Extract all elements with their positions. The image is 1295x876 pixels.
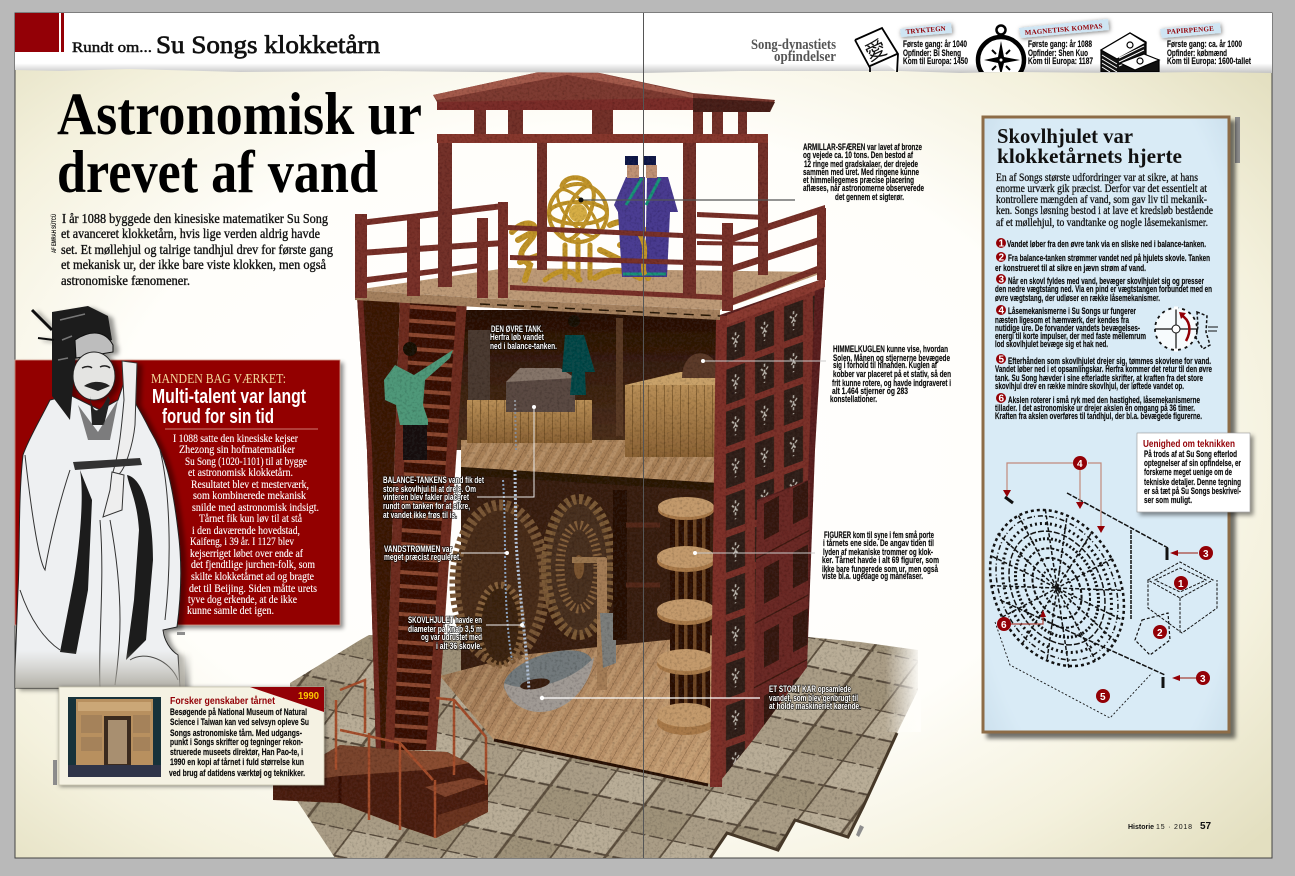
- caption: paddle wheel: SKOVLHJULET havde en: [408, 615, 482, 625]
- water stream: [503, 470, 529, 690]
- stone tile platform: [290, 635, 921, 858]
- callout: uenighed om teknikken: ser som muligt.: [1144, 495, 1192, 505]
- caption: celestial globe: konstellationer.: [830, 394, 877, 404]
- step 4: nutidige ure. De forvander vandets bevægelses-: [995, 323, 1140, 333]
- panel body text: Resultatet blev et mesterværk,: [191, 478, 309, 491]
- step 1: 1: [998, 238, 1004, 250]
- caption: celestial globe: HIMMELKUGLEN kunne vise, hvordan: [833, 344, 948, 354]
- step 6: tillader. I det astronomiske ur drejer akslen én omgang på 36 timer.: [995, 403, 1195, 413]
- header band: [15, 13, 1272, 73]
- step 2: [995, 252, 1210, 273]
- caption: paddle wheel: i alt 36 skovle.: [436, 641, 482, 651]
- panel body text: Songs astronomiske tårn. Med udgangs-: [170, 728, 302, 738]
- inventions heading: [751, 37, 837, 65]
- caption: armillary sphere: 12 ringe med gradskalaer, der drejede: [804, 159, 918, 169]
- panel: skovlhjulet: [964, 117, 1229, 732]
- step 5: Vandet løber ned i et opsamlingskar. Herfra kommer det retur til den øvre: [995, 364, 1212, 374]
- panel body text: snilde med astronomisk indsigt.: [192, 501, 319, 514]
- figure drums: [657, 497, 715, 735]
- callout: uenighed om teknikken: er så tæt på Su Songs beskrivel-: [1144, 486, 1241, 496]
- step 5: skovlhjul drev en række mindre skovlhjul, der løftede vandet op.: [995, 381, 1184, 391]
- panel body text: kejserriget løbet over ende af: [190, 547, 303, 560]
- intro text: astronomiske fænomener.: [61, 273, 190, 288]
- panel heading: [997, 124, 1182, 168]
- page footer: [1128, 821, 1212, 832]
- main title: Astronomisk ur: [57, 81, 422, 147]
- step 3: Når en skovl fyldes med vand, bevæger skovlhjulet sig og presser: [1008, 276, 1204, 286]
- panel body text: i den daværende hovedstad,: [192, 524, 300, 537]
- leader line: tub: [540, 696, 760, 700]
- caption: water stream: [384, 544, 461, 562]
- caption: celestial globe: Solen, Månen og stjernerne bevægede: [833, 353, 950, 363]
- main title: [57, 81, 422, 205]
- label: magnetisk kompas: Første gang: år 1088: [1028, 39, 1092, 49]
- label: magnetisk kompas: Opfinder: Shen Kuo: [1028, 48, 1088, 58]
- caption: figures: viste bl.a. ugedage og månefaser.: [822, 571, 923, 581]
- page footer: 57: [1200, 821, 1212, 832]
- caption: upper tank: DEN ØVRE TANK.: [491, 324, 543, 334]
- caption: celestial globe: sig i forhold til hinanden. Kuglen af: [833, 360, 937, 370]
- crates and tank: [467, 353, 720, 457]
- panel intro: enorme urværk gik præcist. Derfor var det essentielt at: [996, 182, 1208, 195]
- caption: tub: ET STORT KAR opsamlede: [769, 684, 851, 694]
- panel intro: [996, 171, 1213, 229]
- step 4: 4: [998, 306, 1004, 316]
- intro text: et avanceret klokketårn, hvis lige verden aldrig havde: [61, 226, 320, 241]
- caption: figures: FIGURER kom til syne i fem små porte: [824, 530, 934, 540]
- step 5: 5: [998, 354, 1004, 366]
- platform deck: [355, 268, 825, 320]
- panel heading: klokketårnets hjerte: [997, 144, 1182, 168]
- 1990 corner flag: 1990: [298, 691, 319, 702]
- caption: paddle wheel: diameter på knap 3,5 m: [408, 624, 482, 634]
- diagram callouts: 4: [1077, 459, 1083, 470]
- inventions heading: Song-dynastiets: [751, 37, 836, 53]
- diagram callouts: [997, 456, 1213, 703]
- step 4: Låsemekanismerne i Su Songs ur fungerer: [1008, 306, 1136, 316]
- worker at tank: [562, 315, 595, 395]
- step 4: lod skovlhjulet bevæge sig et hak ned.: [995, 339, 1108, 349]
- leader line: celestial globe: [701, 359, 826, 363]
- caption: celestial globe: alt 1.464 stjerner og 283: [832, 386, 908, 396]
- panel body text: [173, 432, 319, 617]
- leader line: armillary: [578, 198, 795, 202]
- panel intro: ken. Songs løsning bestod i at lave et kredsløb bestående: [996, 204, 1213, 217]
- caption: balance tank: [383, 475, 484, 520]
- step 1: [996, 238, 1206, 250]
- entrance steps and railing: [273, 680, 488, 838]
- railings and frame: [355, 202, 826, 311]
- panel: 1990 reconstruction: [59, 687, 324, 785]
- label: papirpenge: Kom til Europa: 1600-tallet: [1167, 56, 1251, 66]
- step 6: [995, 393, 1202, 421]
- tower illustration: [273, 66, 826, 838]
- caption: figures: ker. Tårnet havde i alt 69 figurer, som: [822, 555, 939, 565]
- caption: upper tank: [490, 324, 557, 351]
- panel body text: det til Beijing. Siden måtte urets: [189, 582, 317, 595]
- panel body text: [169, 707, 309, 778]
- label: tryktegn: [900, 23, 968, 66]
- two astronomers: [614, 156, 678, 277]
- label: magnetisk kompas: MAGNETISK KOMPAS: [1024, 22, 1103, 37]
- caption: upper tank: Herfra løb vandet: [490, 332, 544, 342]
- red tab: [15, 13, 64, 52]
- step 5: Efterhånden som skovlhjulet drejer sig, tømmes skovlene for vand.: [1008, 356, 1211, 366]
- panel heading: Multi-talent var langt: [152, 386, 306, 408]
- step 3: den nedre vægtstang ned. Via en pind er vægtstangen forbundet med en: [995, 284, 1212, 294]
- inventions heading: opfindelser: [774, 49, 837, 65]
- caption: armillary sphere: ARMILLAR-SFÆREN var lavet af bronze: [803, 142, 922, 152]
- caption: figures: [822, 530, 939, 581]
- callout: uenighed om teknikken: forskerne meget uenige om de: [1144, 467, 1232, 477]
- label: papirpenge: [1160, 23, 1251, 66]
- step 2: er konstrueret til at sikre en jævn strøm af vand.: [995, 263, 1146, 273]
- panel body text: struerede museets direktør, Han Pao-te, i: [170, 747, 303, 757]
- diagram callouts: 1: [1178, 579, 1184, 590]
- diagram callouts: 5: [1100, 692, 1106, 703]
- callout: uenighed om teknikken: tekniske detaljer. Denne tegning: [1144, 477, 1241, 487]
- diagram callouts: 2: [1157, 628, 1163, 639]
- byline: AF EMRAH SÜTCÜ: [49, 214, 58, 253]
- panel body text: som kombinerede mekanisk: [193, 489, 306, 502]
- caption: balance tank: BALANCE-TANKENS vand fik det: [383, 475, 484, 485]
- step 6: Kraften fra akslen overføres til tandhjul, der bl.a. bevægede figurerne.: [995, 411, 1202, 421]
- caption: armillary sphere: sammen med uret. Med ringene kunne: [803, 167, 919, 177]
- pavilion posts and beam: [437, 110, 768, 296]
- panel body text: Tårnet fik kun løv til at stå: [199, 512, 302, 525]
- step 5: tank. Su Song hævder i sine efterladte skrifter, at kraften fra det store: [995, 373, 1203, 383]
- portrait of Su Song: [15, 306, 185, 688]
- label: papirpenge: PAPIRPENGE: [1167, 25, 1214, 36]
- panel body text: et astronomisk klokketårn.: [188, 466, 293, 479]
- callout: uenighed om teknikken: På trods af at Su Song efterlod: [1144, 449, 1237, 459]
- upper room: [400, 310, 718, 491]
- caption: armillary sphere: aflæses, når astronomerne observerede: [803, 183, 924, 193]
- icon: paper money stacks: [1101, 33, 1159, 72]
- 1990 corner flag: [250, 687, 324, 712]
- intro text: I år 1088 byggede den kinesiske matematiker Su Song: [62, 211, 328, 226]
- panel body text: Zhezong sin hofmatematiker: [179, 443, 295, 456]
- label: papirpenge: Første gang: ca. år 1000: [1167, 39, 1242, 49]
- diagram callouts: 3: [1200, 674, 1206, 685]
- panel body text: Kaifeng, i 39 år. I 1127 blev: [190, 535, 294, 548]
- step 5: [995, 354, 1212, 391]
- caption: celestial globe: [830, 344, 951, 404]
- label: tryktegn: Kom til Europa: 1450: [903, 56, 968, 66]
- step 3: 3: [998, 274, 1004, 286]
- caption: figures: lyden af mekaniske trommer og klok-: [823, 547, 933, 557]
- lower room: [440, 465, 717, 785]
- panel body text: det fjendtlige jurchen-folk, som: [191, 558, 315, 571]
- label: tryktegn: Første gang: år 1040: [903, 39, 967, 49]
- panel body text: I 1088 satte den kinesiske kejser: [173, 432, 298, 445]
- kicker: MANDEN BAG VÆRKET:: [151, 371, 286, 386]
- small printer marks: [53, 117, 1240, 837]
- caption: balance tank: vinteren blev fakler placeret: [383, 492, 469, 502]
- panel body text: tyve dog erkende, at de ikke: [188, 593, 297, 606]
- panel body text: punkt i Songs skrifter og tegninger rekon-: [170, 737, 303, 747]
- panel body text: Besøgende på National Museum of Natural: [170, 707, 307, 717]
- icon: compass: [978, 26, 1024, 83]
- caption: tub: vandet, som blev genbrugt til: [769, 693, 858, 703]
- intro text: set. Et møllehjul og talrige tandhjul drev for første gang: [61, 242, 333, 257]
- roof: [433, 66, 775, 112]
- label: magnetisk kompas: [1019, 19, 1109, 66]
- panel heading: Skovlhjulet var: [997, 124, 1133, 148]
- panel body text: Science i Taiwan kan ved selvsyn opleve Su: [170, 717, 309, 727]
- worker on stairs: [384, 342, 453, 460]
- icon: movable type: 愛: [860, 32, 891, 68]
- caption: figures: ikke bare fungerede som ur, men også: [822, 564, 938, 574]
- step 3: [995, 274, 1212, 303]
- panel intro: af et møllehjul, to vandtanke og nogle låsemekanismer.: [996, 216, 1208, 229]
- leader line: balance tank: [477, 405, 536, 497]
- callout: uenighed om teknikken: Uenighed om teknikken: [1143, 438, 1235, 450]
- diagram callouts: 3: [1203, 549, 1209, 560]
- caption: figures: i tårnets ene side. De angav tiden til: [823, 538, 934, 548]
- step 3: øvre vægtstang, der udløser en række låsemekanismer.: [995, 293, 1160, 303]
- photo of replica tower: [68, 697, 161, 777]
- caption: paddle wheel: [408, 615, 482, 651]
- caption: armillary sphere: et himmellegemes præcise placering: [803, 175, 914, 185]
- caption: celestial globe: frit kunne rotere, og havde indgraveret i: [832, 378, 951, 388]
- label: tryktegn: TRYKTEGN: [905, 25, 946, 36]
- step 4: næsten ligesom et hæmværk, der kendes fra: [995, 315, 1129, 325]
- section heading: Rundt om...: [72, 40, 152, 56]
- panel body text: Su Song (1020-1101) til at bygge: [185, 455, 307, 468]
- icon: escapement diagram: [1155, 308, 1218, 350]
- stairs: [357, 296, 467, 750]
- panel heading: [152, 386, 306, 428]
- tower right side: [710, 278, 825, 787]
- panel intro: kontrollere mængden af vand, som gav liv til mekanik-: [996, 193, 1207, 206]
- step 2: Fra balance-tanken strømmer vandet ned på hjulets skovle. Tanken: [1008, 253, 1210, 263]
- page footer: Historie: [1128, 824, 1154, 831]
- label: tryktegn: Opfinder: Bi Sheng: [903, 48, 961, 58]
- panel: manden bag værket: [15, 360, 340, 625]
- step 2: 2: [998, 252, 1004, 264]
- spine line: [642, 13, 644, 858]
- exploded wheel diagram: [964, 486, 1217, 718]
- leader line: figures: [693, 551, 815, 555]
- panel: 1990 reconstruction: Forsker genskaber tårnet: [170, 695, 276, 707]
- panel heading: forud for sin tid: [162, 406, 274, 428]
- water wheels: [455, 490, 660, 690]
- armillary sphere: [512, 178, 656, 280]
- leader line: water stream: [461, 551, 509, 555]
- step 4: energi til korte impulser, der med faste mellemrum: [995, 331, 1146, 341]
- captions over tower: [383, 142, 951, 711]
- section heading: Su Songs klokketårn: [156, 32, 381, 59]
- step 6: 6: [998, 394, 1004, 404]
- panel body text: kunne samle det igen.: [187, 604, 274, 617]
- caption: upper tank: ned i balance-tanken.: [490, 341, 557, 351]
- caption: balance tank: rundt om tanken for at sikre,: [383, 501, 470, 511]
- tub: [498, 641, 598, 712]
- callout: uenighed om teknikken: optegnelser af sin opfindelse, er: [1144, 458, 1241, 468]
- step 4: [995, 305, 1146, 349]
- label: magnetisk kompas: Kom til Europa: 1187: [1028, 56, 1093, 66]
- caption: tub: at holde maskineriet kørende.: [769, 701, 861, 711]
- leader line: paddle wheel: [486, 623, 524, 627]
- caption: paddle wheel: og var udrustet med: [421, 632, 482, 642]
- section heading: [72, 32, 381, 59]
- step 6: Akslen roterer i små ryk med den hastighed, låsemekanismerne: [1008, 395, 1200, 405]
- main title: drevet af vand: [57, 139, 378, 205]
- caption: celestial globe: kobber var placeret på et stativ, så den: [833, 369, 951, 379]
- caption: water stream: meget præcist reguleret.: [384, 552, 461, 562]
- page footer: 15 · 2018: [1156, 824, 1192, 831]
- intro text: et mekanisk ur, der ikke bare viste klokken, men også: [61, 257, 326, 272]
- panel body text: skilte klokketårnet ad og bragte: [191, 570, 314, 583]
- intro text: [61, 211, 333, 288]
- caption: armillary sphere: det gennem et sigterør.: [835, 192, 904, 202]
- callout: uenighed om teknikken: [1137, 433, 1250, 512]
- panel body text: ved brug af datidens værktøj og teknikker.: [169, 768, 305, 778]
- caption: armillary sphere: og vejede ca. 10 tons. Den bestod af: [803, 150, 913, 160]
- icon: movable type: [855, 28, 898, 72]
- label: papirpenge: Opfinder: købmænd: [1167, 48, 1227, 58]
- step 1: Vandet løber fra den øvre tank via en sliske ned i balance-tanken.: [1007, 239, 1206, 249]
- caption: tub: [769, 684, 861, 711]
- panel intro: En af Songs største udfordringer var at sikre, at hans: [996, 171, 1198, 184]
- caption: water stream: VANDSTRØMMEN var: [384, 544, 452, 554]
- panel body text: 1990 en kopi af tårnet i fuld størrelse kun: [170, 757, 304, 767]
- caption: armillary sphere: [803, 142, 924, 202]
- caption: balance tank: at vandet ikke frøs til is.: [383, 510, 457, 520]
- caption: balance tank: store skovlhjul til at dreje. Om: [383, 484, 476, 494]
- diagram callouts: 6: [1001, 620, 1007, 631]
